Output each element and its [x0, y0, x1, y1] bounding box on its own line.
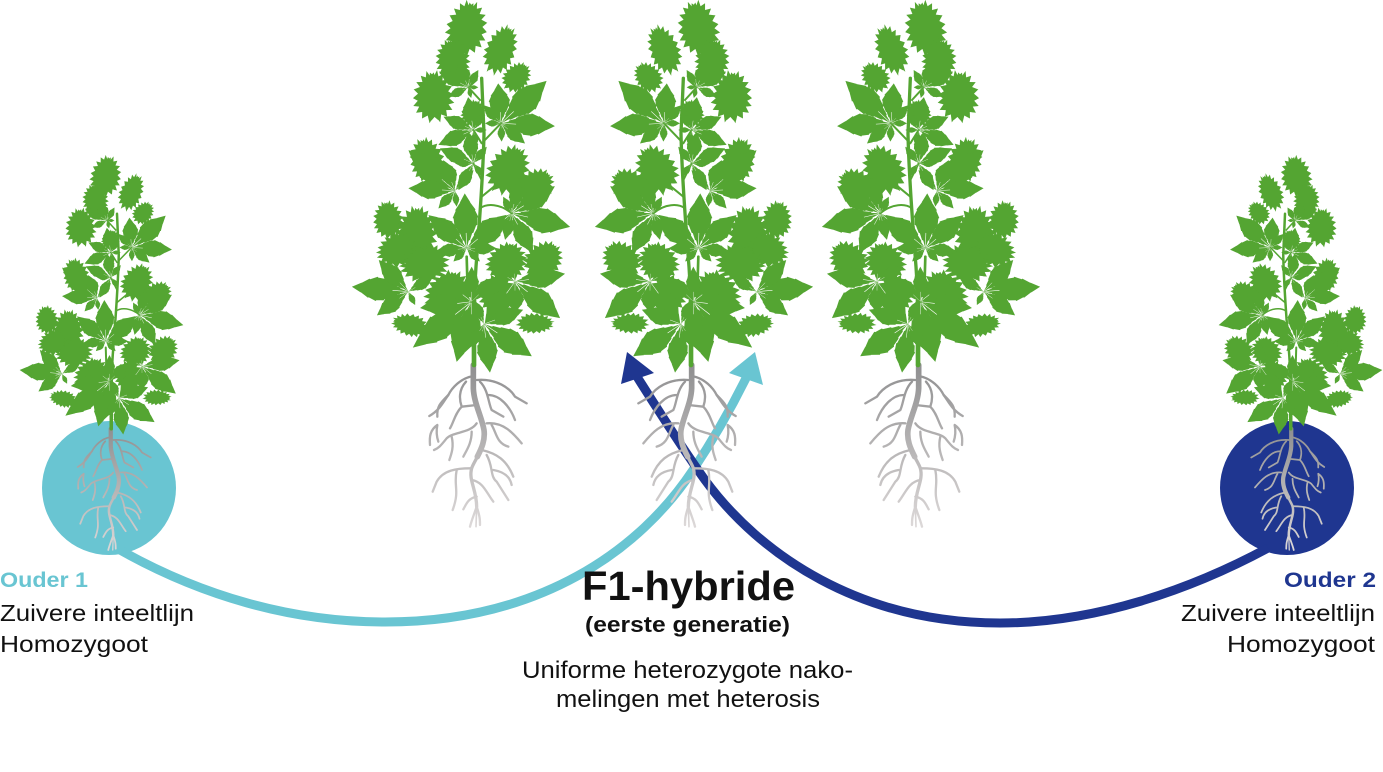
heading: F1-hybride: F1-hybride — [582, 563, 795, 609]
plant: parent 2 — [1213, 151, 1383, 550]
text: parent 1: Zuivere inteeltlijn — [0, 600, 194, 626]
heading: F1-hybride — [582, 563, 795, 637]
text: parent 1 — [0, 569, 194, 657]
arrow: parent 2 to F1 — [621, 352, 1268, 623]
plant: F1 left — [351, 0, 578, 527]
text: parent 2: Ouder 2 — [1284, 569, 1376, 592]
plant: parent 1 — [19, 151, 189, 550]
text: parent 2 — [1181, 569, 1376, 657]
parent 1 circle — [42, 421, 176, 555]
text: parent 1: Ouder 1 — [0, 569, 88, 592]
plant: F1 centre — [587, 0, 814, 527]
arrow: parent 1 to F1 — [120, 352, 763, 622]
plant: F1 right — [814, 0, 1041, 527]
text: F1 description: Uniforme heterozygote nako- — [522, 657, 853, 684]
text: F1 description: melingen met heterosis — [556, 686, 820, 713]
text: F1 description — [522, 657, 853, 713]
heading: F1-hybride: (eerste generatie) — [585, 612, 790, 637]
text: parent 2: Zuivere inteeltlijn — [1181, 600, 1375, 626]
parent 2 circle — [1220, 421, 1354, 555]
text: parent 1: Homozygoot — [0, 631, 149, 657]
text: parent 2: Homozygoot — [1227, 631, 1376, 657]
